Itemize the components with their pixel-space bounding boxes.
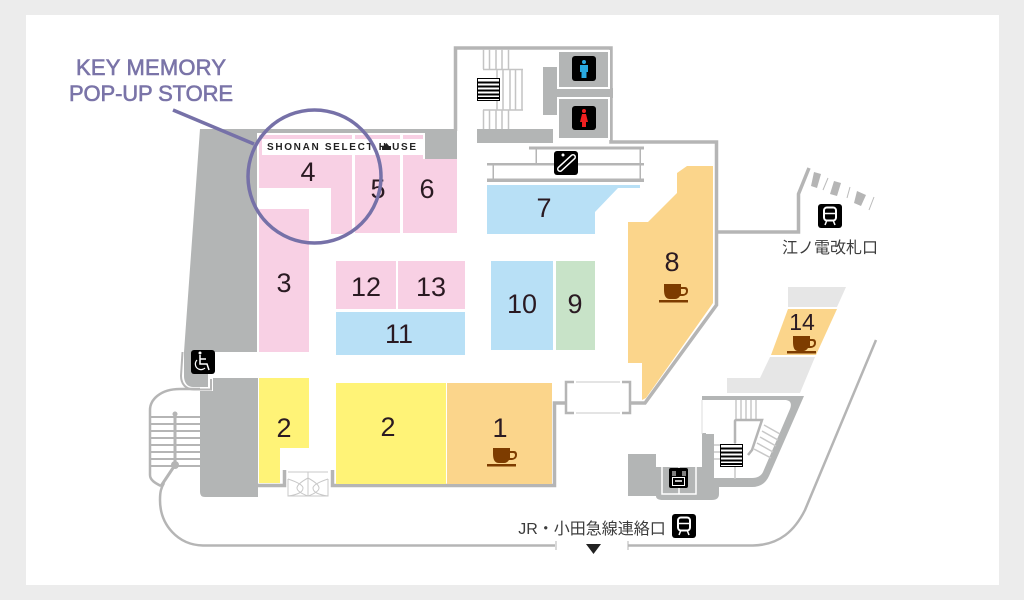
store 10 — [491, 261, 553, 350]
store numbers: 8 — [664, 247, 680, 277]
icon: elevator — [669, 468, 688, 488]
store numbers: 6 — [419, 174, 435, 204]
store numbers: 2 — [380, 412, 396, 442]
shop sign — [262, 139, 423, 155]
store 2 left — [259, 378, 309, 483]
door — [288, 472, 328, 496]
store numbers: 5 — [370, 174, 386, 204]
icon: wheelchair — [191, 350, 215, 374]
lower-right staircase and core — [628, 396, 804, 500]
store 4 — [259, 135, 352, 234]
store 1 — [447, 383, 552, 484]
store numbers: 2 — [276, 413, 292, 443]
icon: coffee cup store 1 — [487, 448, 517, 466]
store 8 — [628, 166, 713, 400]
icon: women restroom — [572, 106, 596, 130]
store numbers: 7 — [536, 193, 552, 223]
light gray platforms — [727, 287, 846, 393]
store 6 — [403, 135, 457, 233]
store 7 — [487, 185, 640, 234]
store numbers — [276, 157, 815, 443]
store 5 — [355, 135, 400, 233]
store 9 — [556, 261, 595, 350]
label: JR and Odakyu connection: JR・小田急線連絡口 — [518, 519, 666, 538]
icon: Enoden train — [818, 204, 842, 228]
store numbers: 13 — [416, 272, 446, 302]
store numbers: 1 — [492, 413, 508, 443]
callout: KEY MEMORY POP-UP STORE — [69, 55, 381, 243]
escalator rails — [487, 146, 644, 182]
icon: coffee cup store 8 — [659, 284, 688, 302]
store numbers: 4 — [300, 157, 316, 187]
restroom rooms — [558, 51, 609, 139]
store numbers: 14 — [789, 309, 815, 335]
stair marker upper — [478, 78, 500, 100]
building walls — [160, 48, 876, 550]
icon: JR train — [672, 514, 696, 538]
Enoden gate ticks — [811, 172, 874, 210]
upper staircase — [483, 49, 523, 129]
store numbers: 9 — [567, 289, 583, 319]
label: Enoden gate: 江ノ電改札口 — [782, 239, 878, 257]
shop sign: SHONAN SELECT H USE — [267, 142, 416, 153]
store 13 — [398, 261, 465, 309]
callout: KEY MEMORY POP-UP STORE: KEY MEMORY — [76, 55, 226, 80]
store 3 — [259, 209, 309, 352]
icon: men restroom — [572, 56, 596, 81]
gray back-of-house areas — [184, 67, 613, 497]
left staircase — [150, 389, 200, 486]
store numbers: 12 — [351, 272, 381, 302]
store numbers: 11 — [385, 319, 413, 349]
store 2 main — [336, 383, 446, 484]
arrow: exit marker — [586, 544, 601, 554]
store 11 — [336, 312, 465, 355]
store 12 — [336, 261, 396, 309]
icon: escalator — [554, 151, 578, 175]
callout: KEY MEMORY POP-UP STORE: POP-UP STORE — [69, 81, 233, 106]
icon: coffee cup store 14 — [787, 336, 816, 354]
entrance frame — [566, 382, 630, 413]
stair marker lower — [720, 444, 742, 466]
store numbers: 10 — [507, 289, 537, 319]
store numbers: 3 — [276, 268, 292, 298]
store 14 — [771, 309, 837, 355]
